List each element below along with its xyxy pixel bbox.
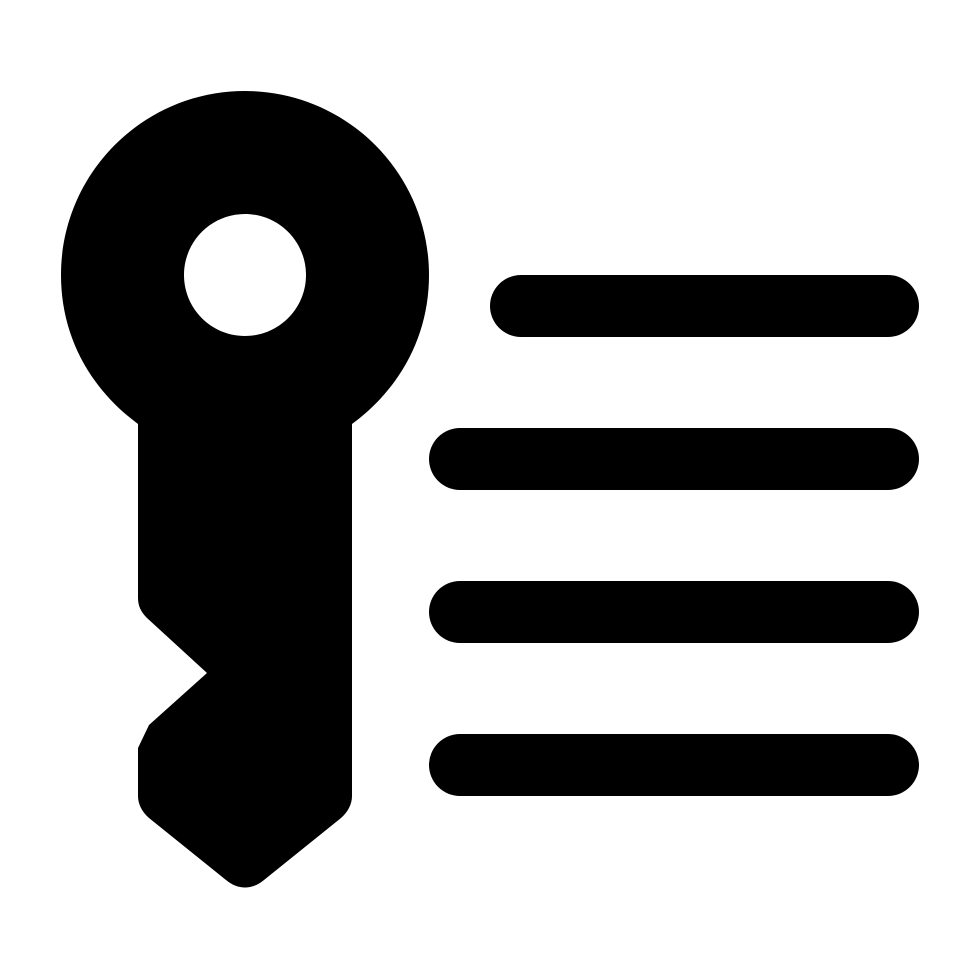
list line 2 [429, 428, 919, 490]
icon: key [61, 91, 429, 888]
list line 3 [429, 581, 919, 643]
list line 4 [429, 734, 919, 796]
list line 1 [490, 275, 919, 337]
